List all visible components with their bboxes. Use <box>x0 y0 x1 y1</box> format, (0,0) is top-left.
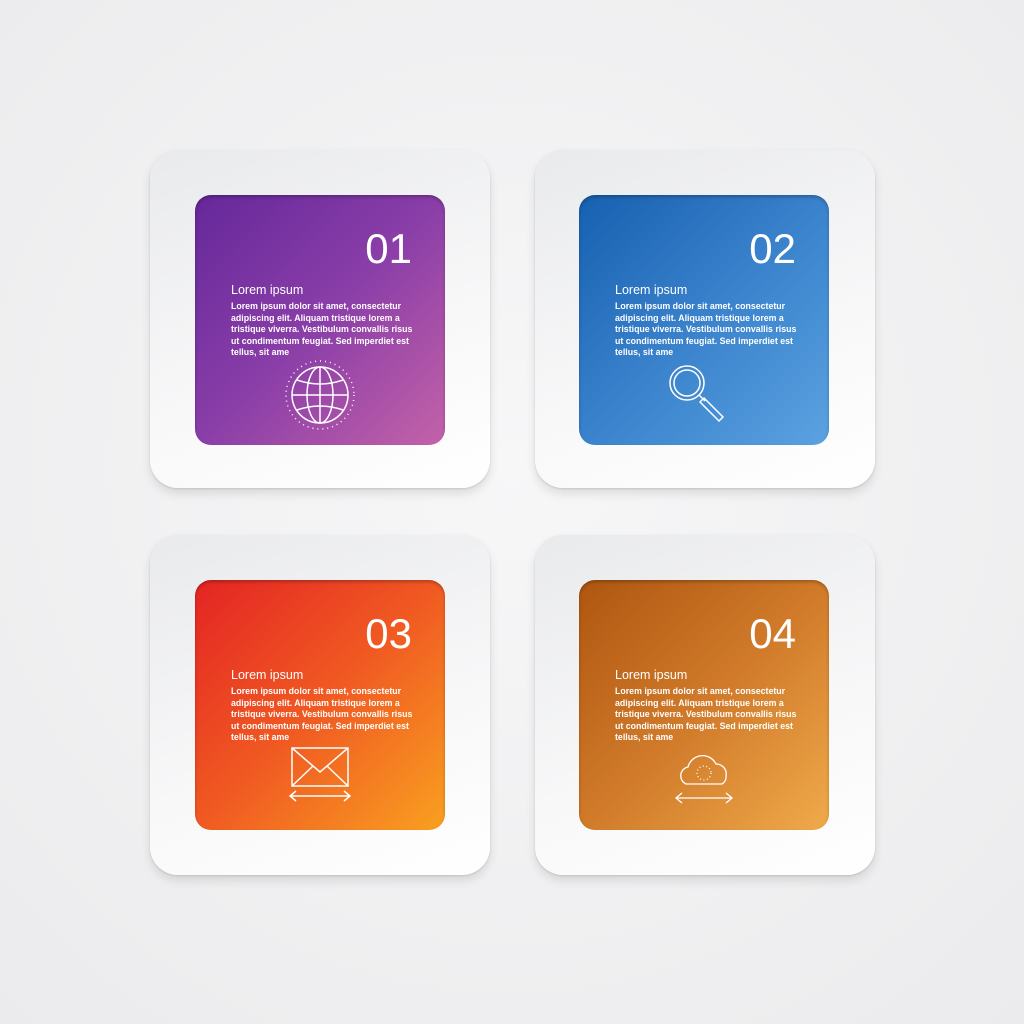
square 01 <box>195 195 445 445</box>
panel: 02 <box>535 150 875 488</box>
icon: cloud <box>675 755 733 804</box>
icon: globe <box>285 360 355 430</box>
panel: 04 <box>535 535 875 875</box>
number 02: 02 <box>749 225 796 272</box>
icon: magnifier <box>669 365 724 422</box>
square 02 <box>579 195 829 445</box>
text 01: Lorem ipsum dolor sit amet, consectetur adipiscing elit. Aliquam tristique lorem a tristique viverra. Vestibulum convallis risus ut condimentum feugiat. Sed imperdiet est tellus, sit ame <box>231 301 412 357</box>
text 03: Lorem ipsum dolor sit amet, consectetur adipiscing elit. Aliquam tristique lorem a tristique viverra. Vestibulum convallis risus ut condimentum feugiat. Sed imperdiet est tellus, sit ame <box>231 686 412 742</box>
text 04: Lorem ipsum dolor sit amet, consectetur adipiscing elit. Aliquam tristique lorem a tristique viverra. Vestibulum convallis risus ut condimentum feugiat. Sed imperdiet est tellus, sit ame <box>615 686 796 742</box>
number 01: 01 <box>365 225 412 272</box>
number 03: 03 <box>365 610 412 657</box>
heading 03: Lorem ipsum <box>231 668 303 682</box>
heading 04: Lorem ipsum <box>615 668 687 682</box>
panel: 01 <box>150 150 490 488</box>
text 02: Lorem ipsum dolor sit amet, consectetur adipiscing elit. Aliquam tristique lorem a tristique viverra. Vestibulum convallis risus ut condimentum feugiat. Sed imperdiet est tellus, sit ame <box>615 301 796 357</box>
heading 02: Lorem ipsum <box>615 283 687 297</box>
panel: 03 <box>150 535 490 875</box>
number 04: 04 <box>749 610 796 657</box>
icon: envelope <box>288 747 352 802</box>
square 04 <box>579 580 829 830</box>
square 03 <box>195 580 445 830</box>
heading 01: Lorem ipsum <box>231 283 303 297</box>
